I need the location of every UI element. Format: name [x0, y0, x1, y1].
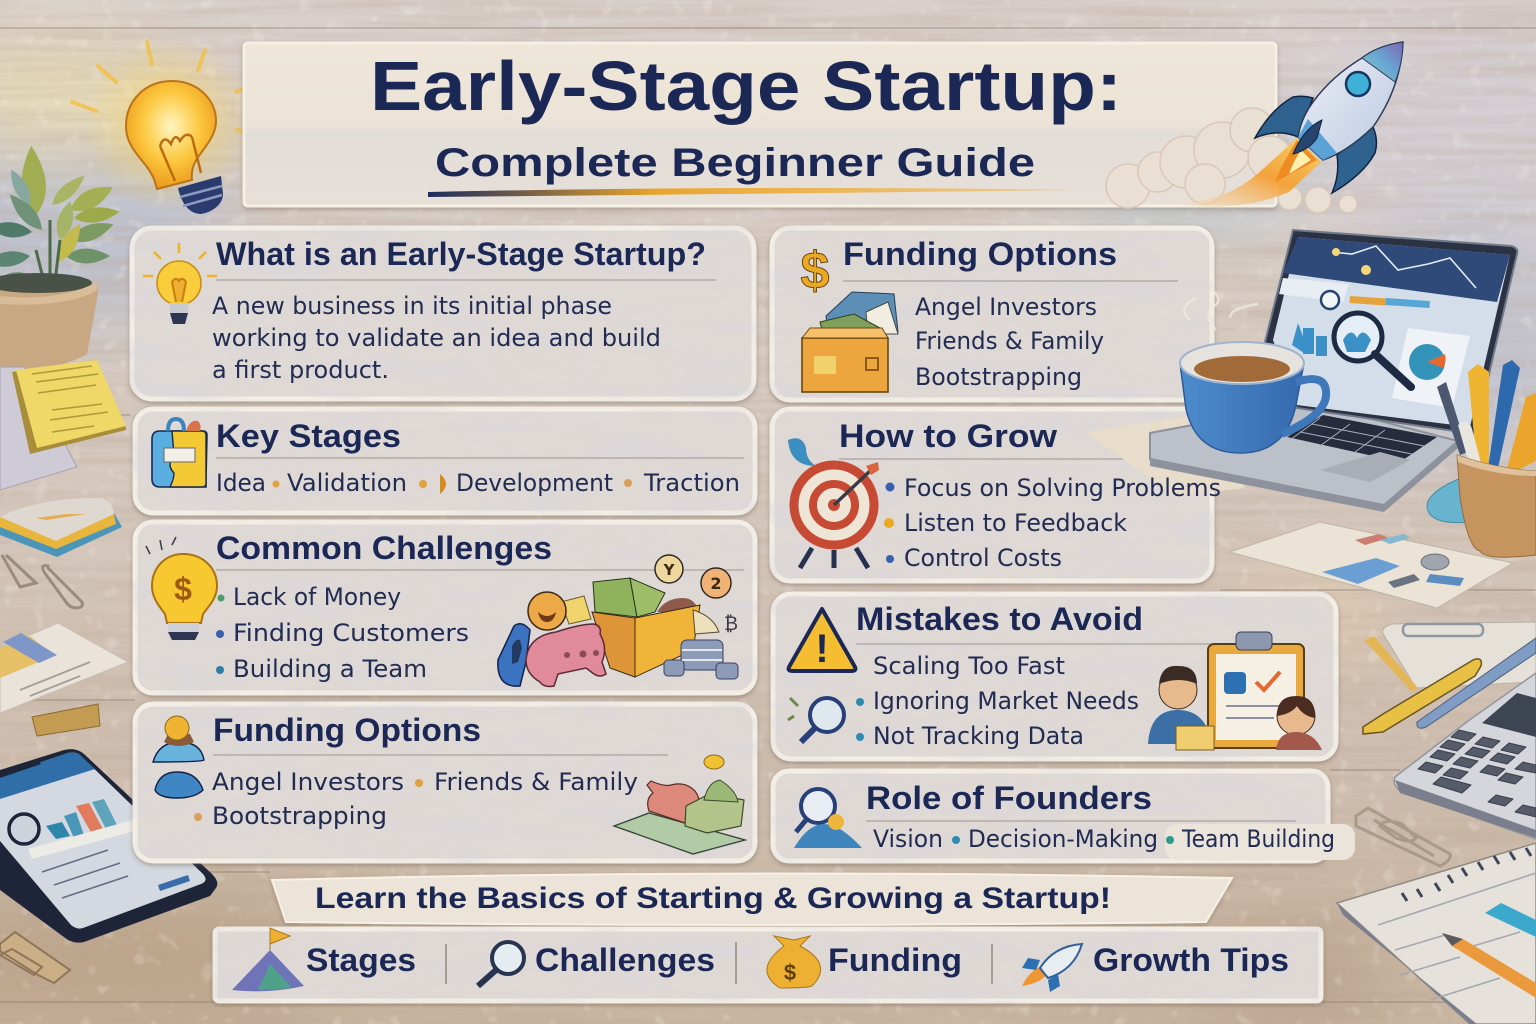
nav item: funding: $ — [784, 960, 796, 985]
icon: founder with magnifier — [794, 789, 862, 848]
challenge list — [216, 583, 469, 683]
role list: Decision-Making — [968, 825, 1158, 853]
stage list: Development — [456, 469, 613, 497]
icon: paper and clip right — [1364, 622, 1536, 692]
title: Early-Stage Startup: — [370, 47, 1122, 125]
icon: dollar bulb — [146, 537, 217, 640]
mistakes list: Not Tracking Data — [873, 722, 1084, 750]
mistakes list: Ignoring Market Needs — [873, 687, 1139, 715]
illustration: piggy bank, box, coins — [498, 555, 738, 686]
nav item: stages — [232, 928, 416, 991]
stage list: Traction — [643, 469, 740, 497]
nav item: funding — [767, 936, 962, 988]
icon: graph paper pad — [0, 367, 77, 490]
icon: yellow sticky notes — [12, 360, 126, 454]
icon: small bulb — [143, 243, 217, 324]
icon: pencil cup — [1437, 360, 1536, 557]
nav item: challenges: Challenges — [535, 942, 715, 978]
icon: rocket with cloud trail — [1106, 42, 1403, 213]
options list — [915, 293, 1104, 391]
description: a first product. — [212, 356, 389, 384]
icon: notebook with pencil — [1337, 843, 1536, 1024]
nav item: funding: Funding — [828, 942, 962, 978]
nav item: challenges — [478, 942, 715, 986]
options list: Bootstrapping — [915, 363, 1082, 391]
role list: Vision — [873, 825, 943, 853]
tips list — [884, 482, 1127, 572]
icon: smartphone — [0, 749, 217, 943]
heading: Mistakes to Avoid — [856, 601, 1143, 637]
subtitle: Complete Beginner Guide — [435, 141, 1035, 185]
warning mark: ! — [815, 627, 829, 671]
panel: title banner — [244, 43, 1276, 206]
panel: key stages — [135, 409, 755, 513]
papers right — [1230, 522, 1513, 608]
description: A new business in its initial phase — [212, 292, 612, 320]
mistakes list — [856, 652, 1139, 750]
paper under laptop — [1085, 414, 1245, 496]
stage list — [216, 469, 740, 497]
icon: potted plant — [0, 145, 121, 369]
challenge list: Lack of Money — [233, 583, 401, 611]
illustration: clipboard and people — [1148, 632, 1322, 750]
heading: Key Stages — [216, 418, 401, 454]
options: Angel Investors — [212, 768, 404, 796]
panel: mistakes to avoid — [773, 594, 1336, 759]
icon: people — [153, 716, 204, 798]
heading: Role of Founders — [866, 780, 1152, 816]
heading: Common Challenges — [216, 530, 552, 566]
challenge list: Finding Customers — [233, 619, 469, 647]
icon: magnifier — [788, 698, 844, 742]
icon: calculator — [1394, 673, 1536, 839]
role list — [873, 824, 1355, 860]
banner: call to action — [272, 873, 1232, 925]
icon: large paper clip — [1356, 808, 1450, 866]
panel: role of founders — [773, 771, 1355, 861]
stage list: Validation — [287, 469, 407, 497]
panel: what is an early-stage startup — [132, 228, 754, 399]
icon: paper clip bottom left — [0, 932, 70, 983]
description: working to validate an idea and build — [212, 324, 661, 352]
text: focus on solving problems (overlaps laptop base): Focus on Solving Problems — [904, 474, 1221, 502]
heading: What is an Early-Stage Startup? — [216, 236, 706, 272]
banner: call to action: Learn the Basics of Starting & Growing a Startup! — [315, 882, 1111, 915]
mistakes list: Scaling Too Fast — [873, 652, 1065, 680]
icon: gold binder clip — [32, 704, 100, 736]
heading: How to Grow — [839, 418, 1057, 454]
panel: funding options right — [772, 228, 1212, 400]
laptop with dashboard — [1150, 230, 1517, 512]
tips list: Control Costs — [904, 544, 1062, 572]
icon: folder — [152, 419, 207, 487]
icon: teal eraser — [1427, 478, 1471, 523]
icon: dollar sign and box: $ — [801, 242, 830, 300]
icon: warning triangle — [788, 609, 856, 671]
panel: how to grow — [772, 409, 1212, 581]
panel: funding options left — [135, 704, 755, 861]
icon: dollar bulb: $ — [174, 571, 192, 607]
challenge list: Building a Team — [233, 655, 427, 683]
panel: common challenges — [135, 522, 755, 693]
panel: bottom navigation strip — [215, 928, 1321, 1001]
icon: blue pen — [1417, 638, 1536, 728]
illustration: piggy bank, box, coins: Y — [663, 561, 676, 579]
icon: blue coffee cup — [1180, 290, 1326, 453]
tips list: Listen to Feedback — [904, 509, 1127, 537]
icon: stack of folders — [0, 498, 122, 557]
icon: chart paper left — [0, 623, 128, 713]
options: Friends & Family — [434, 768, 638, 796]
icon: light bulb with glow — [72, 37, 260, 214]
options list: Friends & Family — [915, 327, 1104, 355]
description — [212, 292, 661, 384]
illustration: piggy bank, box, coins: ₿ — [724, 613, 738, 635]
illustration: piggy bank, box, coins: 2 — [710, 574, 722, 593]
nav item: stages: Stages — [306, 942, 416, 978]
role list: Team Building — [1181, 825, 1335, 853]
nav item: growth tips — [1022, 942, 1289, 992]
icon: target with arrow — [788, 438, 879, 568]
heading: Funding Options — [843, 236, 1117, 272]
options: Bootstrapping — [212, 802, 387, 830]
title underline — [428, 188, 1078, 197]
icon: dollar sign and box — [801, 242, 898, 392]
options — [194, 768, 638, 830]
illustration: piggy bank and money — [614, 755, 745, 854]
icon: paper clips — [2, 555, 82, 608]
options list: Angel Investors — [915, 293, 1097, 321]
nav item: growth tips: Growth Tips — [1093, 942, 1289, 978]
stage list: Idea — [216, 469, 266, 497]
heading: Funding Options — [213, 712, 481, 748]
icon: yellow pencil — [1363, 659, 1481, 734]
